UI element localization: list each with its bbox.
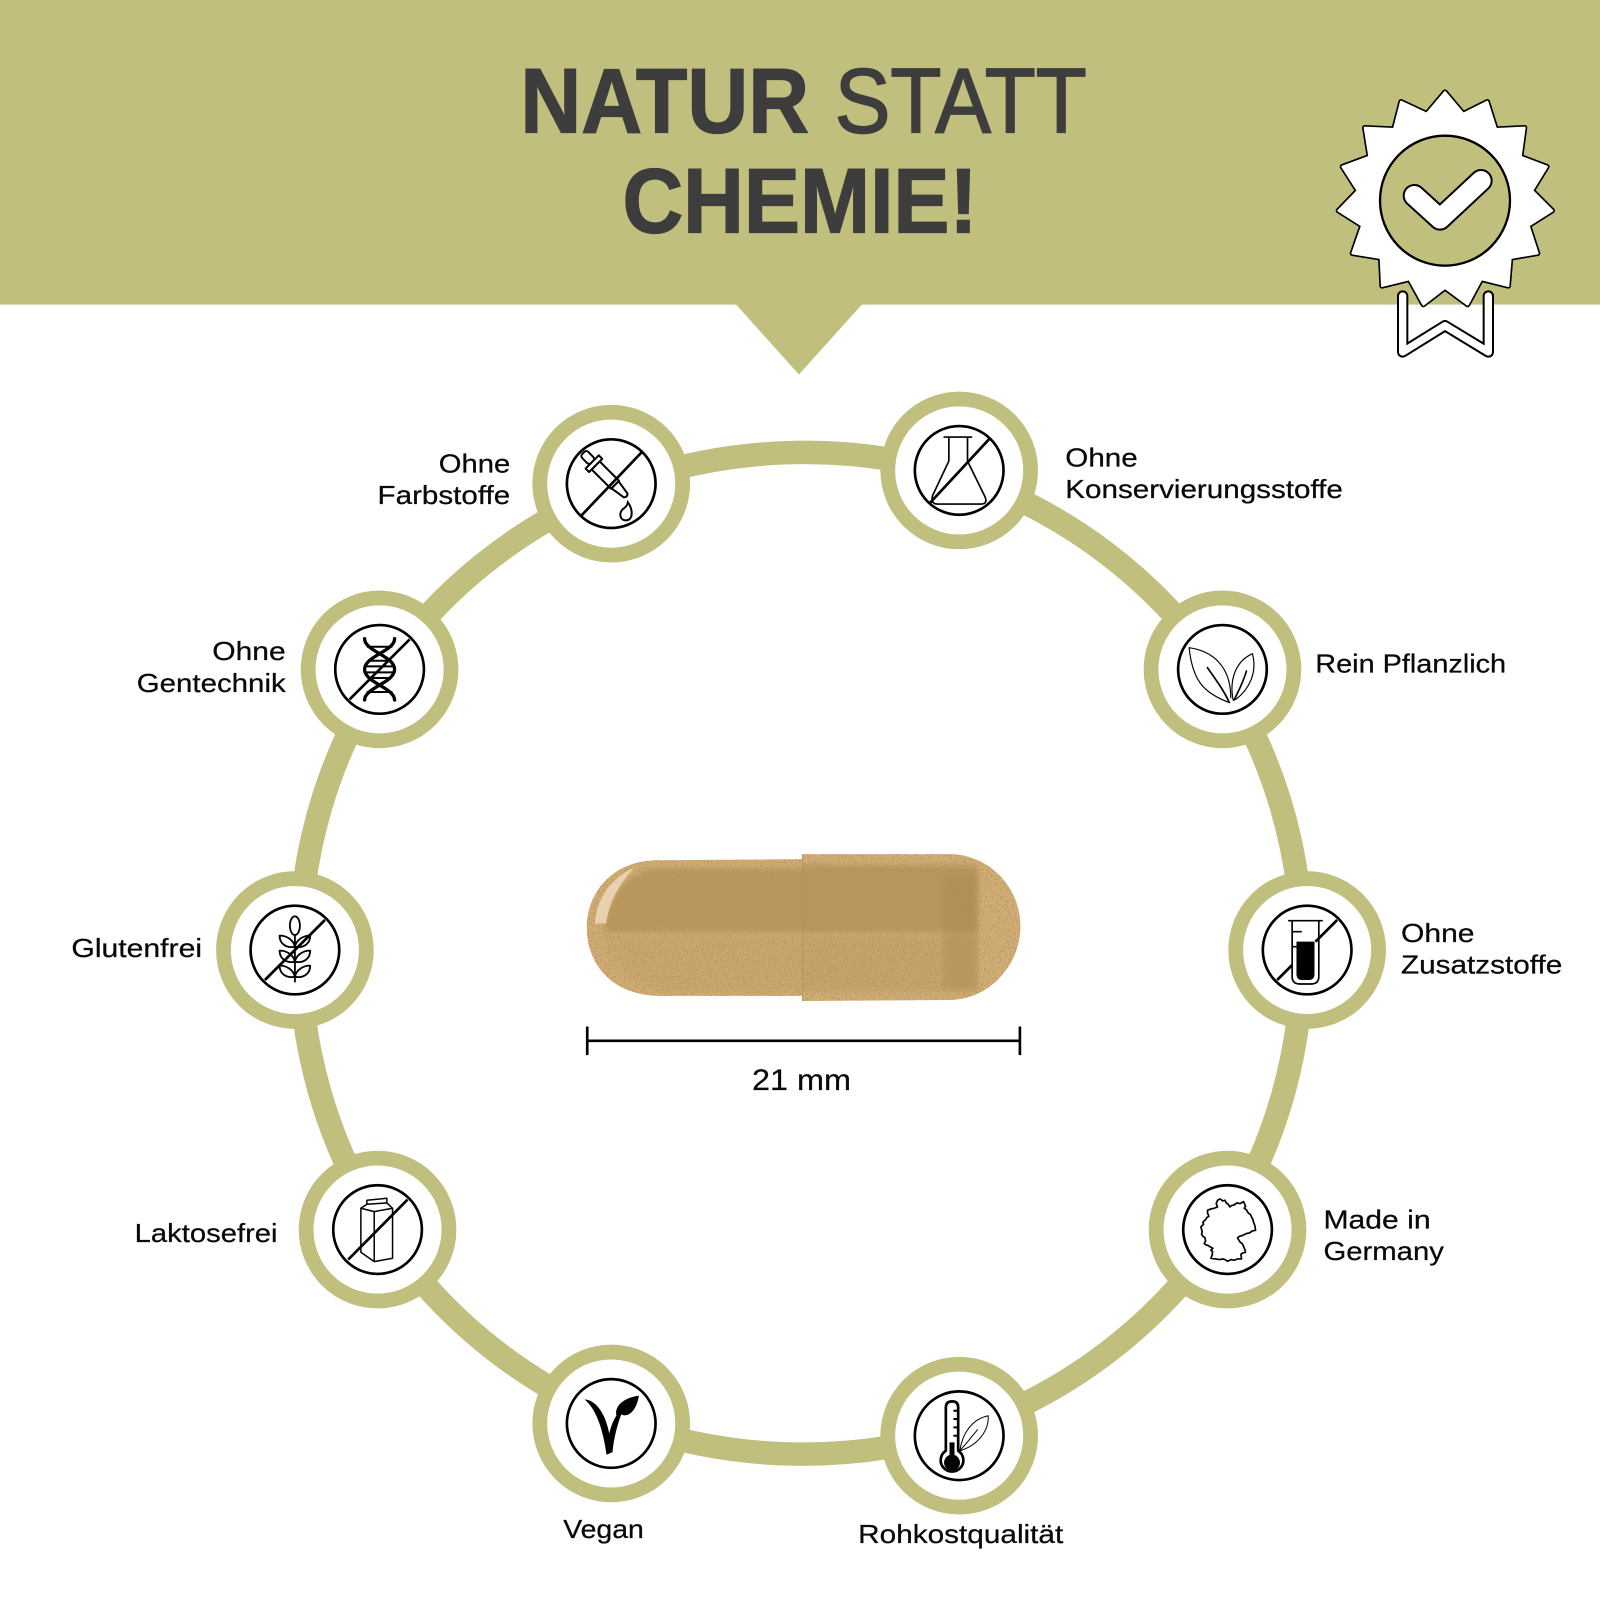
icon: crossed DNA	[335, 625, 424, 714]
label: Ohne Gentechnik: Gentechnik	[137, 670, 286, 698]
header band	[0, 0, 1600, 374]
label: Ohne Farbstoffe	[378, 450, 510, 510]
label: Ohne Konservierungsstoffe	[1065, 444, 1343, 504]
label: Rohkostqualität: Rohkostqualität	[858, 1521, 1063, 1549]
label: Ohne Zusatzstoffe: Ohne	[1401, 920, 1474, 948]
icon: crossed wheat	[251, 906, 339, 994]
label: Made in Germany: Made in	[1323, 1207, 1431, 1235]
label: Ohne Farbstoffe: Farbstoffe	[378, 482, 510, 510]
icon: crossed dropper	[567, 439, 656, 528]
label: Vegan: Vegan	[563, 1516, 644, 1544]
label: Ohne Zusatzstoffe	[1401, 920, 1562, 979]
label: Rein Pflanzlich: Rein Pflanzlich	[1315, 650, 1506, 678]
icon: thermometer and leaf	[915, 1391, 1004, 1480]
badge: Made in Germany	[1156, 1158, 1299, 1301]
badge: Laktosefrei	[306, 1158, 449, 1301]
label: Laktosefrei: Laktosefrei	[135, 1220, 278, 1248]
badge: Ohne Farbstoffe	[540, 412, 683, 555]
title: STATT	[835, 51, 1087, 153]
icon: crossed flask	[915, 426, 1004, 515]
badge: Ohne Konservierungsstoffe	[888, 399, 1031, 542]
title: CHEMIE!	[622, 151, 978, 253]
label: Made in Germany: Germany	[1323, 1238, 1444, 1266]
label: Ohne Gentechnik: Ohne	[212, 638, 286, 666]
title	[520, 51, 1087, 253]
icon: quality seal badge with ribbon	[1338, 92, 1552, 352]
icon: leaves	[1178, 625, 1267, 714]
scale label: 21 mm	[752, 1064, 851, 1097]
icon: Germany outline	[1183, 1185, 1272, 1274]
badge: Ohne Gentechnik	[308, 598, 451, 741]
badge: Vegan	[540, 1352, 683, 1495]
label: Ohne Gentechnik	[137, 638, 286, 698]
badge: Rein Pflanzlich	[1151, 598, 1294, 741]
label: Ohne Zusatzstoffe: Zusatzstoffe	[1401, 951, 1562, 979]
label: Ohne Konservierungsstoffe: Ohne	[1065, 444, 1138, 472]
label: Ohne Konservierungsstoffe: Konservierungsstoffe	[1065, 476, 1343, 504]
badge: Ohne Zusatzstoffe	[1236, 879, 1379, 1021]
icon: crossed test tube	[1263, 906, 1351, 994]
label: Made in Germany	[1323, 1207, 1444, 1266]
capsule photo	[587, 854, 1021, 1002]
icon: crossed milk carton	[333, 1185, 422, 1274]
label: Glutenfrei: Glutenfrei	[71, 935, 202, 963]
label: Ohne Farbstoffe: Ohne	[439, 450, 510, 478]
scale bar	[587, 1027, 1020, 1055]
icon: vegan V with leaf	[567, 1379, 656, 1468]
connecting ring	[300, 452, 1302, 1454]
badge: Glutenfrei	[223, 879, 366, 1021]
title: NATUR	[520, 51, 809, 153]
badge: Rohkostqualität	[888, 1364, 1031, 1507]
